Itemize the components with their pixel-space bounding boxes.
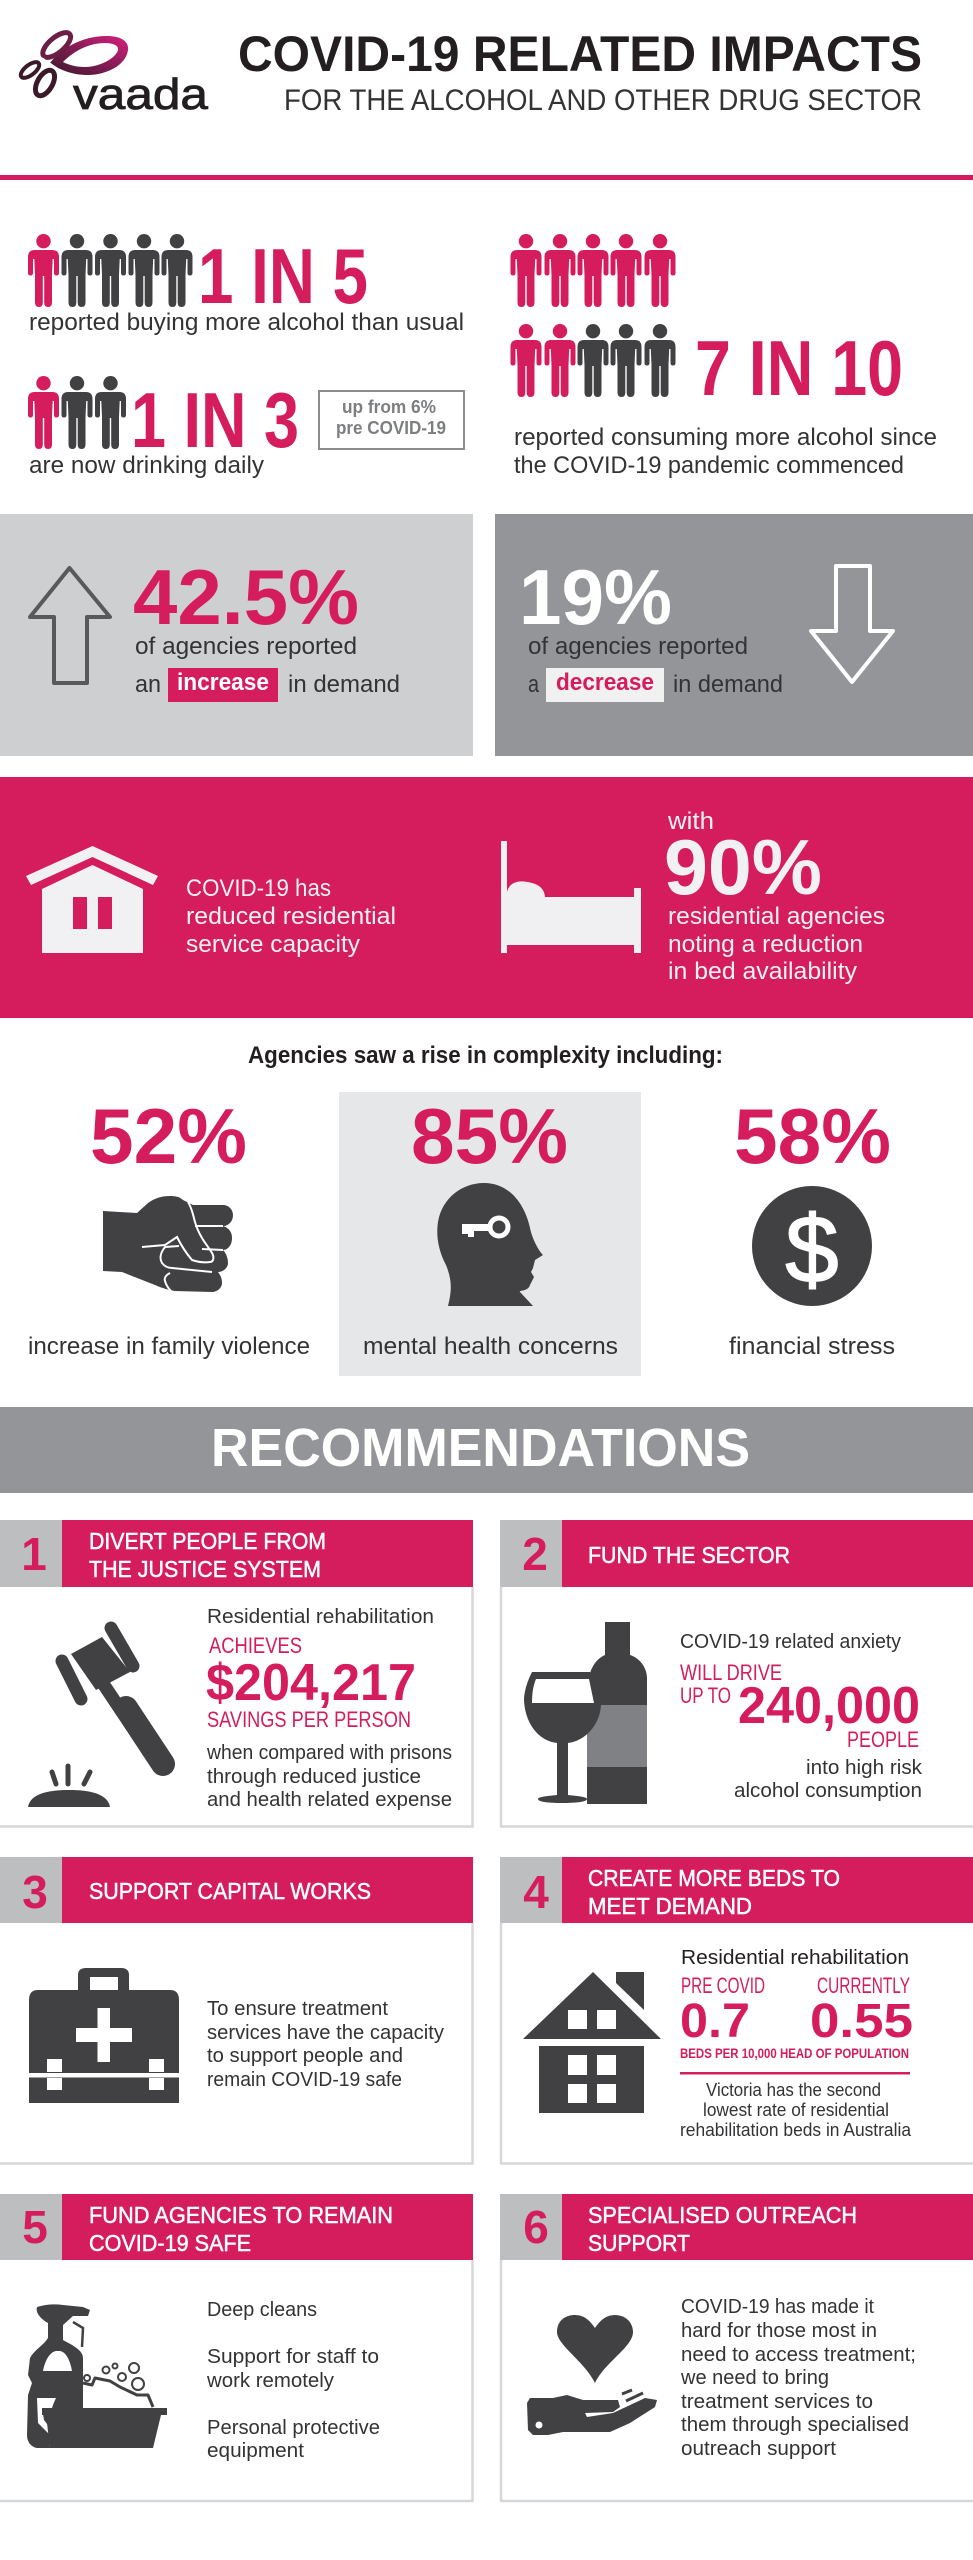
panel: recommendation 6: need to access treatment; [681,2344,916,2366]
callout: up from 6%: pre COVID-19 [336,418,446,438]
stat: family violence: 52% [90,1092,247,1180]
panel: recommendation 6: we need to bring [680,2367,829,2389]
panel: recommendation 2: alcohol consumption [734,1780,922,1802]
panel: recommendation 4: Residential rehabilitation [681,1947,909,1969]
stat: 7 in 10 consuming more alcohol [510,234,937,479]
stat: financial stress: financial stress [729,1333,895,1360]
panel: increase in demand: increase [177,669,269,696]
panel: decrease in demand: a [528,671,540,698]
subtitle: FOR THE ALCOHOL AND OTHER DRUG SECTOR [284,84,922,117]
panel: recommendation 5: 5 [22,2201,48,2253]
panel: recommendation 1 [0,1520,473,1826]
stat: 7 in 10 consuming more alcohol: reported consuming more alcohol since [514,424,937,451]
icon: down arrow [811,566,893,682]
stat: 1 in 5 buying more alcohol [28,232,464,336]
panel: recommendation 6: SPECIALISED OUTREACH [588,2202,857,2228]
panel: recommendation 6: 6 [523,2201,549,2253]
stat: 1 in 3 drinking daily: 1 IN 3 [131,376,299,464]
panel: recommendation 1: and health related expense [207,1789,452,1811]
panel: increase in demand: in demand [288,671,400,698]
banner: recommendations [0,1407,973,1493]
icon: dollar coin [752,1186,872,1306]
panel: recommendation 5: Personal protective [207,2417,380,2439]
panel: decrease in demand: in demand [673,671,783,698]
panel: recommendation 5: work remotely [206,2370,334,2392]
panel: recommendation 2: 240,000 [738,1677,920,1735]
panel: recommendation 4: 0.7 [680,1995,750,2048]
panel: recommendation 1: THE JUSTICE SYSTEM [89,1556,321,1582]
panel: recommendation 3: To ensure treatment [207,1998,388,2020]
stat: 7 in 10 consuming more alcohol: 7 IN 10 [695,324,903,412]
panel: recommendation 3 [0,1857,473,2164]
stat: mental health [339,1092,641,1376]
panel: decrease in demand: decrease [556,669,654,696]
icon: house with windows [523,1972,661,2113]
panel: recommendation 6: treatment services to [681,2391,873,2413]
panel: recommendation 2: FUND THE SECTOR [588,1542,790,1568]
icon: wine bottle and glass [524,1622,647,1804]
panel: recommendation 3: SUPPORT CAPITAL WORKS [89,1878,371,1904]
stat: 1 in 5 buying more alcohol: 1 IN 5 [198,232,368,320]
icon: fist [103,1196,233,1292]
stat: financial stress: 58% [734,1092,891,1180]
icon: three people, one highlighted [28,376,126,449]
panel: recommendation 4: CURRENTLY [817,1973,910,1998]
panel: residential capacity: service capacity [186,931,360,958]
icon: ten people, seven highlighted [510,234,676,397]
panel: recommendation 2: UP TO [680,1683,731,1708]
panel: recommendation 2: WILL DRIVE [680,1660,782,1685]
panel: recommendation 5: COVID-19 SAFE [89,2230,251,2256]
panel: recommendation 1: 1 [21,1528,47,1580]
panel: residential capacity [0,777,973,1018]
panel: recommendation 1: ACHIEVES [209,1633,302,1658]
panel: recommendation 4: rehabilitation beds in Australia [680,2120,912,2140]
panel: increase in demand: an [135,671,161,698]
panel: recommendation 5: equipment [207,2440,304,2462]
panel: recommendation 2: 2 [522,1528,548,1580]
logo: vaada [18,28,209,119]
panel: residential capacity: noting a reduction [668,931,863,958]
stat: mental health: mental health concerns [363,1333,618,1360]
panel: increase in demand: of agencies reported [135,633,357,660]
icon: five people, one highlighted [28,234,192,307]
panel: recommendation 4: CREATE MORE BEDS TO [588,1865,840,1891]
panel: recommendation 6: outreach support [681,2438,836,2460]
panel: recommendation 4: lowest rate of residential [703,2100,889,2120]
stat: financial stress [729,1092,895,1360]
logo: vaada: vaada [73,70,209,119]
callout: up from 6%: up from 6% [342,397,436,417]
panel: recommendation 2: COVID-19 related anxiety [680,1631,901,1653]
panel: recommendation 6 [500,2194,973,2501]
icon: gavel [28,1628,163,1807]
banner: recommendations: RECOMMENDATIONS [211,1418,750,1478]
stat: 7 in 10 consuming more alcohol: the COVID-19 pandemic commenced [514,452,904,479]
stat: 1 in 3 drinking daily [28,376,299,479]
panel: recommendation 4: 0.55 [810,1995,913,2048]
panel: residential capacity: reduced residential [186,903,396,930]
panel: recommendation 5: Deep cleans [207,2299,317,2321]
panel: recommendation 3: remain COVID-19 safe [207,2069,402,2091]
stat: mental health: 85% [411,1092,568,1180]
icon: heart in hand [527,2315,657,2435]
panel: recommendation 1: Residential rehabilitation [207,1606,434,1628]
panel: residential capacity: COVID-19 has [186,875,331,902]
panel: recommendation 5: FUND AGENCIES TO REMAIN [89,2202,393,2228]
stat: family violence: increase in family violence [28,1333,310,1360]
panel: recommendation 4: BEDS PER 10,000 HEAD OF POPULATION [680,2045,909,2061]
panel: recommendation 6: COVID-19 has made it [681,2296,874,2318]
panel: residential capacity: 90% [664,823,822,911]
panel: recommendation 1: when compared with prisons [206,1742,452,1764]
panel: recommendation 4: MEET DEMAND [588,1893,752,1919]
stat: family violence [28,1092,310,1360]
panel: residential capacity: with [667,808,714,835]
panel: recommendation 2 [500,1520,973,1826]
panel: recommendation 4 [500,1857,973,2164]
panel: recommendation 1: through reduced justice [207,1766,421,1788]
icon: house [26,846,158,953]
panel: recommendation 6: them through specialised [681,2414,909,2436]
panel: recommendation 4: 4 [523,1866,549,1918]
panel: recommendation 6: SUPPORT [588,2230,690,2256]
panel: recommendation 5: Support for staff to [207,2346,379,2368]
panel: recommendation 1: DIVERT PEOPLE FROM [89,1528,326,1554]
panel: recommendation 2: into high risk [806,1757,923,1779]
panel: increase in demand [0,514,473,756]
panel: recommendation 5 [0,2194,473,2501]
icon: bed [501,841,641,953]
icon: first aid kit [29,1968,179,2103]
panel: decrease in demand: of agencies reported [528,633,748,660]
stat: 1 in 5 buying more alcohol: reported buying more alcohol than usual [29,309,464,336]
panel: recommendation 6: hard for those most in [681,2320,877,2342]
panel: recommendation 1: SAVINGS PER PERSON [207,1707,411,1732]
icon: up arrow [30,568,110,683]
panel: recommendation 3: to support people and [207,2045,403,2067]
panel: increase in demand: 42.5% [133,553,359,641]
icon: dollar coin: $ [785,1196,839,1303]
panel: residential capacity: in bed availability [668,958,857,985]
stat: 1 in 3 drinking daily: are now drinking daily [29,452,264,479]
panel: recommendation 4: Victoria has the second [706,2080,881,2100]
panel: recommendation 1: $204,217 [206,1654,416,1712]
title: COVID-19 RELATED IMPACTS [238,26,922,82]
panel: recommendation 4: PRE COVID [681,1973,765,1998]
heading: complexity: Agencies saw a rise in complexity including: [248,1042,723,1069]
icon: head with key [437,1183,543,1306]
panel: recommendation 3: services have the capacity [207,2022,444,2044]
panel: residential capacity: residential agencies [668,903,885,930]
panel: decrease in demand: 19% [519,553,672,641]
panel: decrease in demand [495,514,973,756]
callout: up from 6% [319,391,464,449]
panel: recommendation 3: 3 [22,1866,48,1918]
panel: recommendation 2: PEOPLE [847,1727,919,1752]
icon: spray bottle and basin [27,2304,167,2448]
